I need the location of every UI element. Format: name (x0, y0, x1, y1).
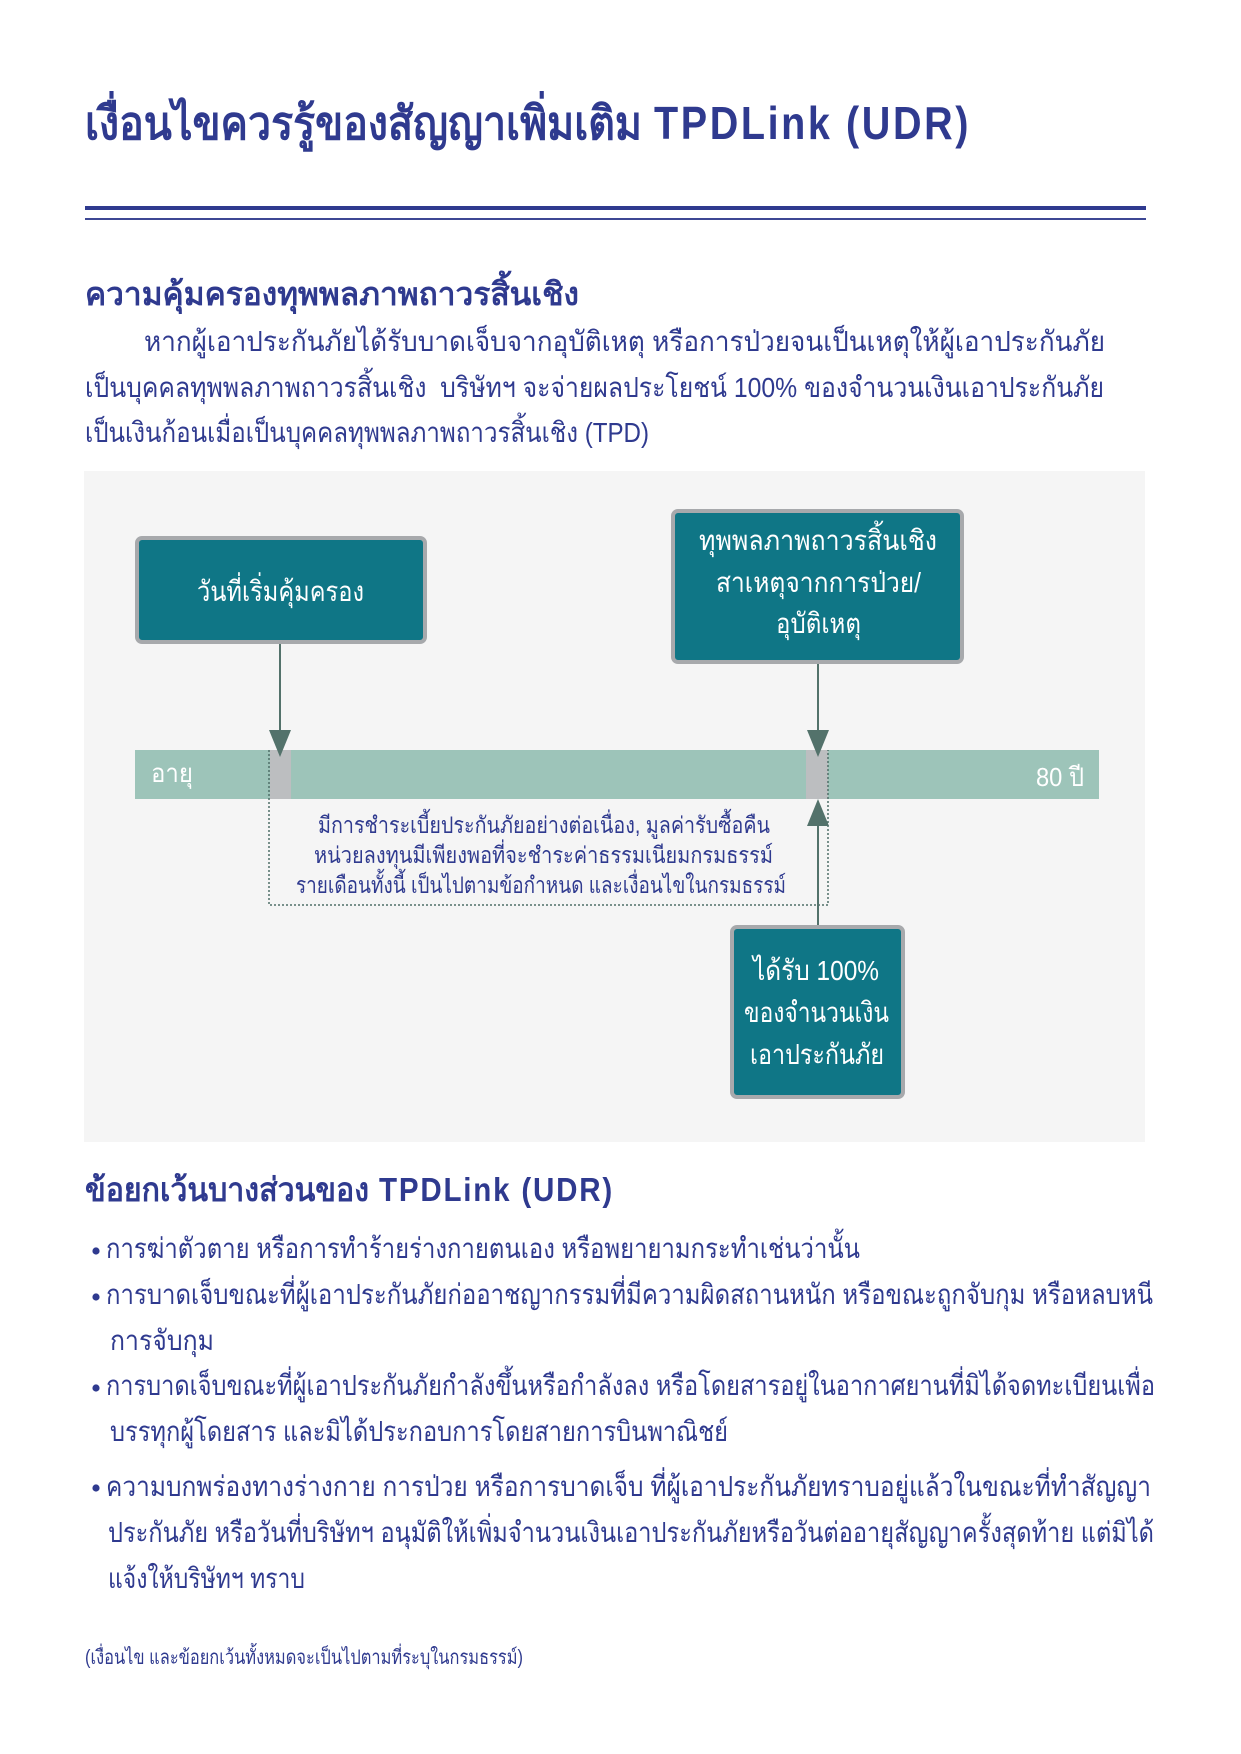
box: receive 100%: เอาประกันภัย (750, 1039, 884, 1070)
dotted premium period box: หน่วยลงทุนมีเพียงพอที่จะชำระค่าธรรมเนียมกรมธรรม์ (314, 839, 773, 869)
bullet list: exclusions: แจ้งให้บริษัทฯ ทราบ (108, 1562, 305, 1594)
age bar: 80 ปี (1036, 762, 1084, 792)
text block: coverage description: เป็นบุคคลทุพพลภาพถาวรสิ้นเชิง บริษัทฯ จะจ่ายผลประโยชน์ 100% ของจำนวนเงินเอาประกันภัย (85, 367, 1104, 405)
heading: exclusions: TPDLink (UDR) (379, 1171, 614, 1208)
box: receive 100%: ได้รับ 100% (751, 955, 879, 986)
title: TPDLink (UDR) (654, 97, 971, 149)
text block: coverage description: เป็นเงินก้อนเมื่อเป็นบุคคลทุพพลภาพถาวรสิ้นเชิง (TPD) (85, 412, 649, 450)
age bar (135, 750, 1099, 799)
bullet list: exclusions (92, 1228, 1155, 1594)
dotted premium period box: รายเดือนทั้งนี้ เป็นไปตามข้อกำหนด และเงื่อนไขในกรมธรรม์ (296, 869, 786, 898)
box: TPD from illness or accident (673, 511, 962, 662)
bullet list: exclusions: บรรทุกผู้โดยสาร และมิได้ประกอบการโดยสายการบินพาณิชย์ (110, 1415, 728, 1449)
box: coverage start date: วันที่เริ่มคุ้มครอง (197, 572, 364, 609)
dotted premium period box: มีการชำระเบี้ยประกันภัยอย่างต่อเนื่อง, มูลค่ารับซื้อคืน (318, 809, 770, 839)
bullet list: exclusions: การฆ่าตัวตาย หรือการทำร้ายร่างกายตนเอง หรือพยายามกระทำเช่นว่านั้น (106, 1228, 860, 1264)
box: TPD from illness or accident: อุบัติเหตุ (776, 608, 861, 641)
age bar: อายุ (151, 758, 193, 789)
box: receive 100%: ของจำนวนเงิน (744, 997, 889, 1028)
arrow: start to bar (269, 644, 291, 757)
box: TPD from illness or accident: ทุพพลภาพถาวรสิ้นเชิง (699, 520, 937, 558)
panel: timeline diagram (84, 471, 1145, 1142)
bullet list: exclusions: การจับกุม (110, 1325, 214, 1358)
box: coverage start date (137, 538, 425, 642)
text block: coverage description: หากผู้เอาประกันภัยได้รับบาดเจ็บจากอุบัติเหตุ หรือการป่วยจนเป็นเหตุให้ผู้เอาประกันภัย (144, 324, 1105, 359)
text block: coverage description (85, 324, 1105, 450)
arrow: TPD to bar (807, 664, 829, 757)
box: TPD from illness or accident: สาเหตุจากการป่วย/ (716, 567, 921, 600)
heading: TPD coverage: ความคุ้มครองทุพพลภาพถาวรสิ้นเชิง (85, 270, 579, 315)
dotted premium period box (269, 750, 828, 905)
title: เงื่อนไขควรรู้ของสัญญาเพิ่มเติม (85, 91, 642, 152)
heading: exclusions: ข้อยกเว้นบางส่วนของ (85, 1171, 369, 1208)
title double rule (85, 206, 1146, 220)
footnote: (เงื่อนไข และข้อยกเว้นทั้งหมดจะเป็นไปตามที่ระบุในกรมธรรม์) (85, 1643, 523, 1670)
title (85, 91, 971, 152)
box: receive 100% (732, 927, 903, 1097)
arrow: payout to bar (807, 799, 829, 925)
heading: exclusions (85, 1171, 614, 1208)
